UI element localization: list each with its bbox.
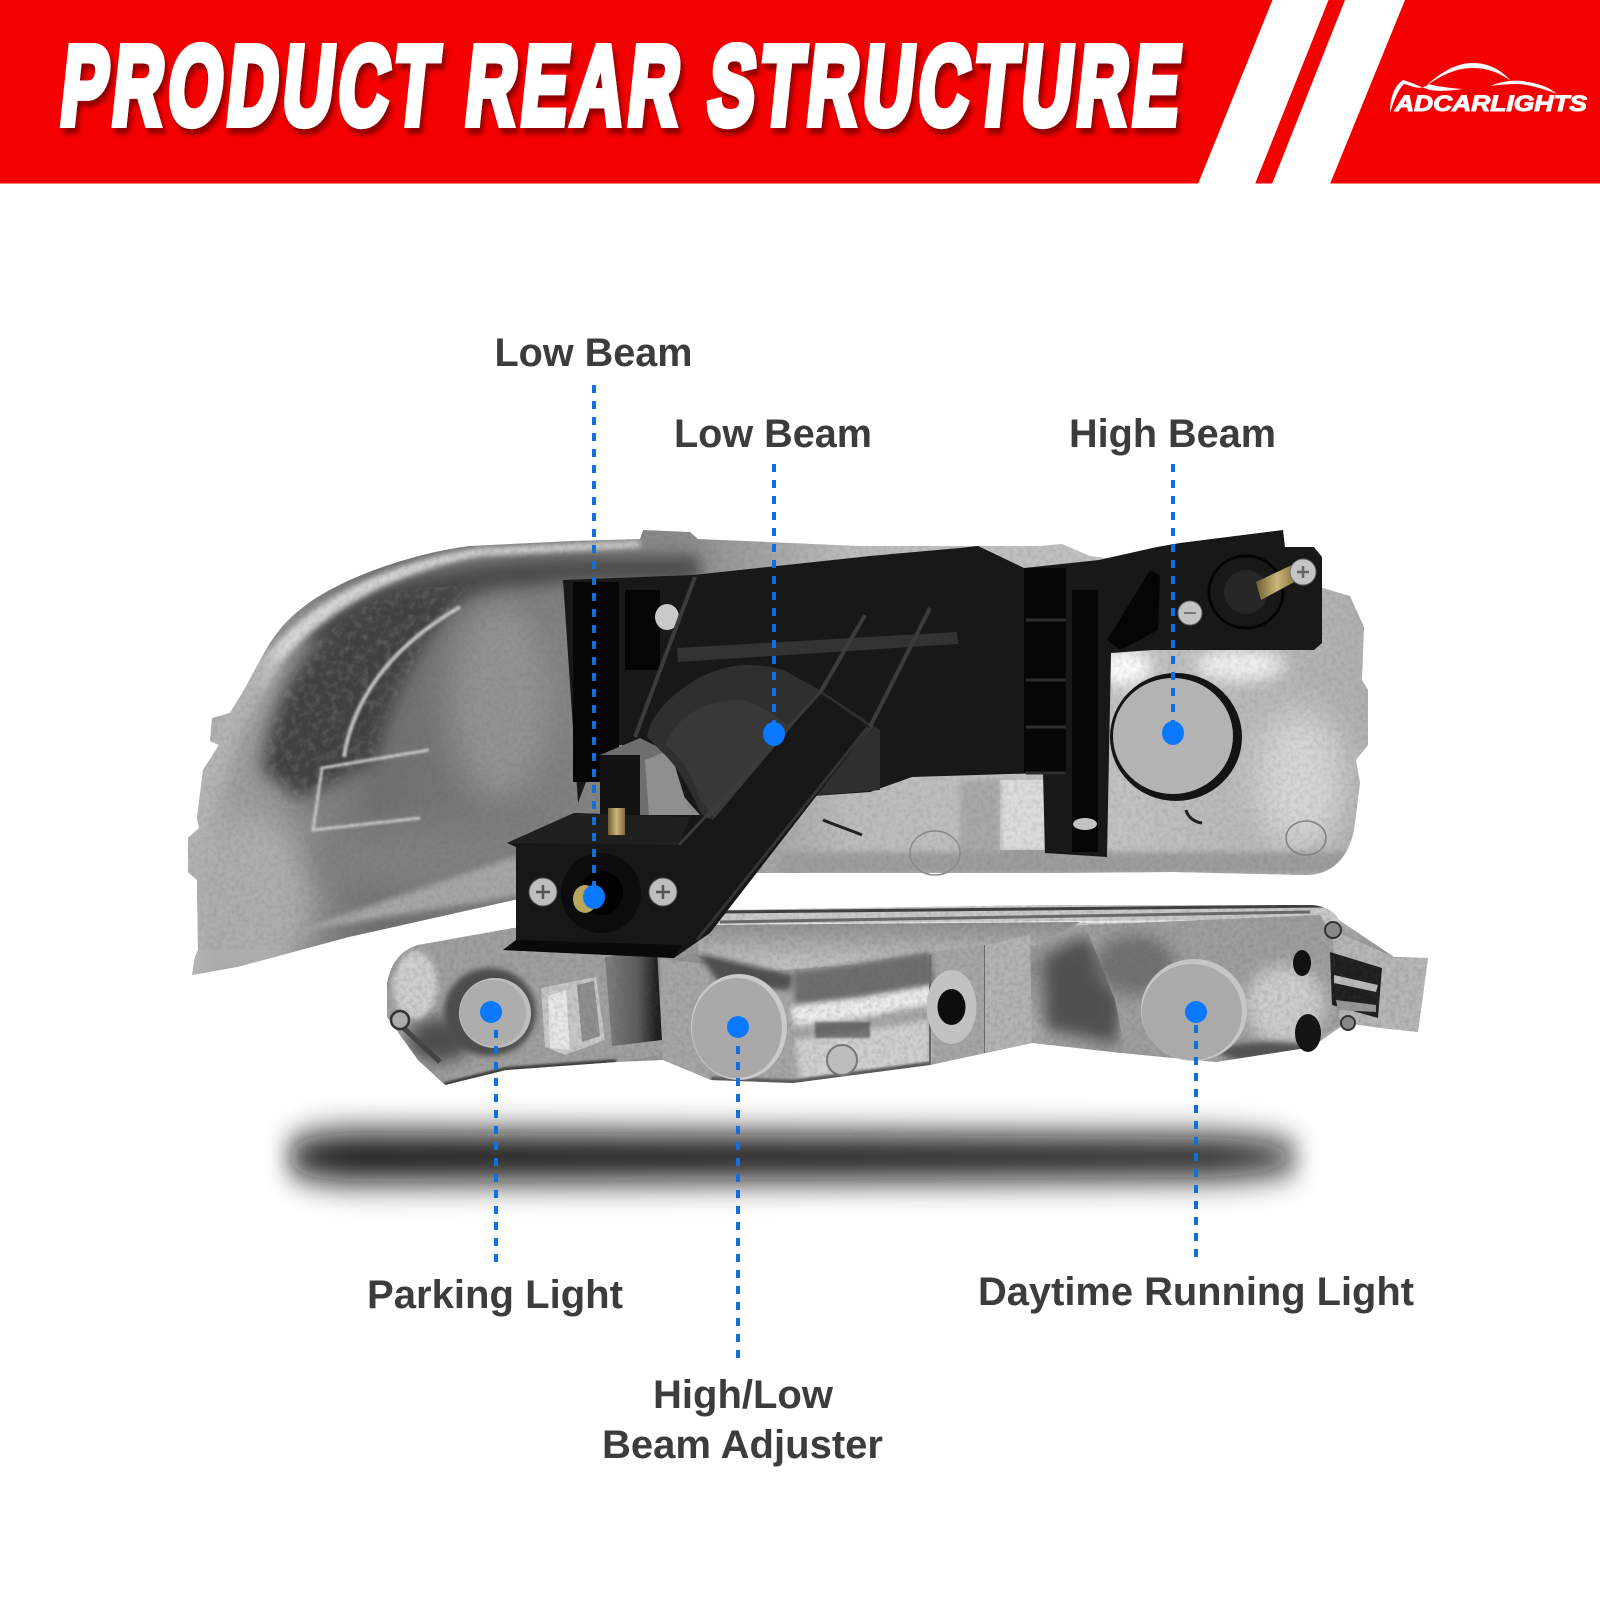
dark recess [1045, 935, 1122, 1045]
left rim [192, 655, 268, 975]
callout: high/low beam adjuster: Beam Adjuster [602, 1423, 883, 1467]
white nut [655, 604, 679, 630]
lower wedge [312, 856, 516, 930]
title: PRODUCT REAR STRUCTURE [55, 22, 1192, 148]
top band [300, 556, 700, 650]
lower lip [445, 1062, 616, 1085]
embossed rectangle [313, 750, 429, 830]
bracket lower arm [503, 693, 870, 958]
logo: ADCARLIGHTS [1390, 63, 1587, 116]
turn signal lamp (lower unit) [370, 900, 1440, 1090]
parking light cap [459, 978, 531, 1048]
grey bulb mount [600, 738, 680, 835]
callout: high/low beam adjuster: High/Low [653, 1373, 834, 1417]
callout: high/low beam adjuster [602, 1016, 883, 1467]
crescent highlight [344, 607, 460, 757]
tray face [698, 922, 1080, 972]
callout: daytime running light [978, 1001, 1414, 1314]
right clip [1332, 930, 1428, 1032]
callout: daytime running light: Daytime Running Light [978, 1270, 1414, 1314]
left end [387, 928, 660, 1085]
upper screws [1178, 559, 1316, 625]
cross bar [677, 632, 958, 662]
callout: parking light [367, 1001, 623, 1317]
dark mottled area [262, 590, 465, 800]
adjuster cap [691, 974, 787, 1080]
upper socket [1209, 556, 1298, 628]
callout: low beam 2: Low Beam [674, 412, 872, 456]
gold post [608, 808, 625, 835]
callout: high beam [1069, 412, 1276, 745]
bracket wires [635, 577, 930, 840]
bracket ribs [573, 568, 1160, 852]
lower screws [529, 878, 677, 906]
rubber boot [647, 665, 880, 845]
headlight housing (upper unit) [170, 510, 1380, 985]
logo: ADCARLIGHTS: ADCARLIGHTS [1394, 91, 1587, 116]
high beam cap [1110, 673, 1242, 801]
callout: high beam: High Beam [1069, 412, 1276, 456]
embossed marks [391, 922, 1355, 1075]
header banner [0, 0, 1600, 184]
daytime running light cap [1141, 959, 1247, 1061]
black mounting bracket [503, 530, 1322, 958]
right bulb [1085, 915, 1345, 1062]
callout: low beam 1: Low Beam [494, 331, 692, 375]
hole in lamp [926, 970, 976, 1044]
chrome top strip [700, 905, 1340, 925]
callout: low beam 1 [494, 331, 692, 909]
bracket upper body [563, 530, 1322, 857]
ground shadow [285, 1133, 1300, 1181]
housing embossed circles and marks [823, 810, 1326, 875]
callout: parking light: Parking Light [367, 1273, 623, 1317]
right body light and shade [1099, 650, 1151, 686]
chrome band [660, 940, 1032, 1083]
callout: low beam 2 [674, 412, 872, 746]
lower socket [561, 853, 641, 933]
